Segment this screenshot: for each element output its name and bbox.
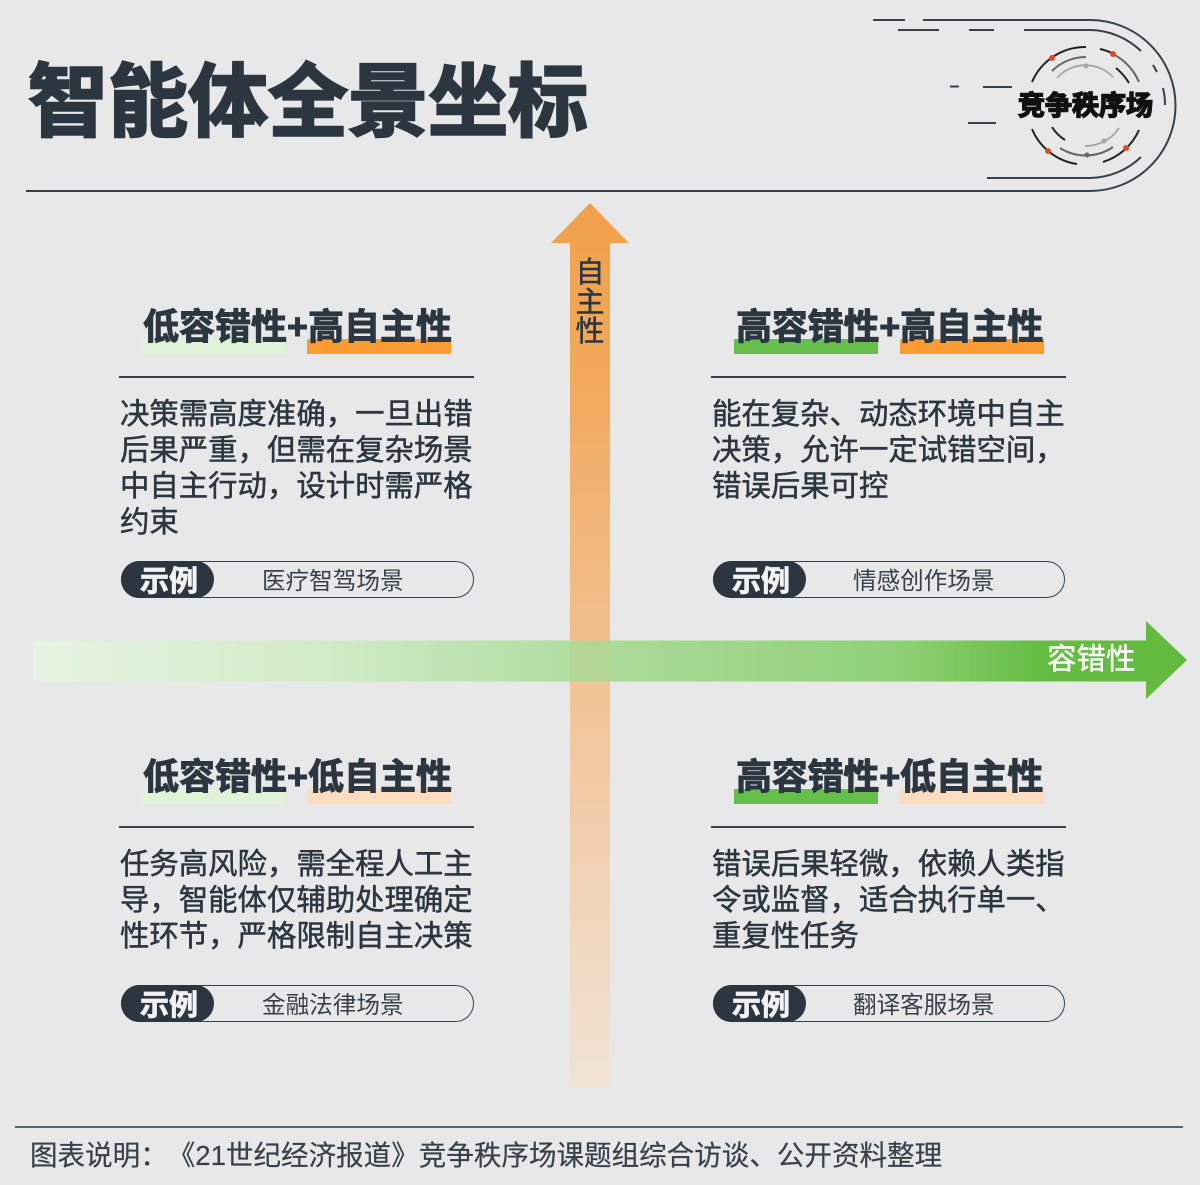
example pill <box>713 985 1065 1022</box>
heading: 低容错性+高自主性 <box>143 306 452 347</box>
description: 令或监督，适合执行单一、 <box>712 884 1065 917</box>
vertical axis label <box>575 257 604 348</box>
horizontal axis label: 容错性 <box>1047 643 1136 676</box>
panel: low tolerance, low autonomy <box>119 756 474 1022</box>
vertical axis label: 主 <box>575 286 604 318</box>
horizontal arrow: error tolerance <box>34 621 1187 699</box>
example pill <box>713 561 1065 598</box>
example pill: 翻译客服场景 <box>853 993 995 1019</box>
heading: 低容错性+低自主性 <box>143 756 452 797</box>
panel: high tolerance, high autonomy <box>711 306 1066 598</box>
example pill: 示例 <box>732 990 790 1022</box>
example pill: 情感创作场景 <box>853 569 995 595</box>
description: 决策需高度准确，一旦出错 <box>120 398 473 431</box>
example pill <box>121 561 474 598</box>
description: 任务高风险，需全程人工主 <box>120 848 473 881</box>
footer note: 图表说明：《21世纪经济报道》竞争秩序场课题组综合访谈、公开资料整理 <box>30 1140 942 1171</box>
vertical arrow: autonomy <box>551 203 629 1088</box>
description: 能在复杂、动态环境中自主 <box>712 398 1065 431</box>
example pill: 示例 <box>140 990 198 1022</box>
panel: low tolerance, high autonomy <box>119 306 474 598</box>
description <box>712 398 1065 503</box>
description <box>120 398 473 539</box>
vertical axis label: 性 <box>575 316 604 348</box>
panel: high tolerance, low autonomy <box>711 756 1066 1022</box>
vertical axis label: 自 <box>575 257 604 289</box>
description: 决策，允许一定试错空间， <box>712 434 1065 467</box>
example pill: 金融法律场景 <box>262 993 404 1019</box>
example pill <box>121 985 474 1022</box>
heading: 高容错性+低自主性 <box>736 756 1043 797</box>
description: 后果严重，但需在复杂场景 <box>120 434 473 467</box>
description: 导，智能体仅辅助处理确定 <box>120 884 473 917</box>
title: 智能体全景坐标 <box>28 58 588 147</box>
heading: 高容错性+高自主性 <box>736 306 1043 347</box>
example pill: 示例 <box>140 566 198 598</box>
example pill: 医疗智驾场景 <box>262 569 404 595</box>
logo wordmark: 竞争秩序场 <box>1018 91 1153 121</box>
description: 性环节，严格限制自主决策 <box>120 920 473 953</box>
description <box>120 848 473 953</box>
description <box>712 848 1065 953</box>
example pill: 示例 <box>732 566 790 598</box>
header frame with logo <box>26 19 1176 192</box>
logo rings <box>1032 47 1139 164</box>
description: 中自主行动，设计时需严格 <box>120 470 473 503</box>
description: 重复性任务 <box>712 920 859 953</box>
description: 错误后果可控 <box>712 470 888 503</box>
description: 约束 <box>120 506 179 539</box>
description: 错误后果轻微，依赖人类指 <box>712 848 1065 881</box>
